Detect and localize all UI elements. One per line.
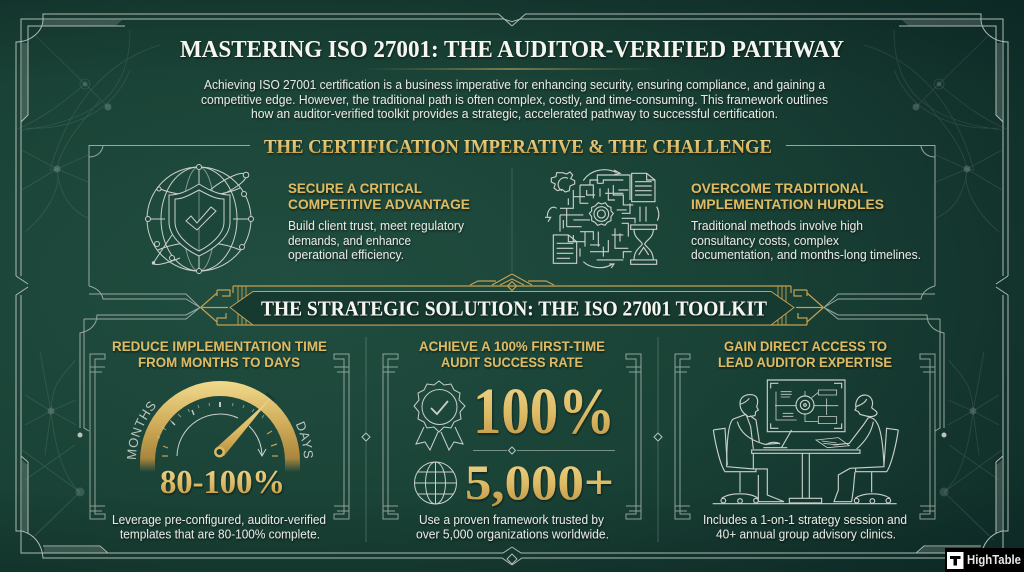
intro text: competitive edge. However, the traditional path is often complex, costly, and time-consuming. This framework outlines: [201, 92, 828, 107]
column heading: [112, 339, 327, 370]
section heading: THE CERTIFICATION IMPERATIVE & THE CHALLENGE: [264, 136, 772, 158]
column heading: AUDIT SUCCESS RATE: [441, 355, 583, 370]
panel frame: [89, 146, 935, 308]
metric divider: [473, 447, 615, 454]
column text: Use a proven framework trusted by: [419, 512, 604, 527]
intro text: how an auditor-verified toolkit provides a strategic, accelerated pathway to successful certification.: [251, 106, 778, 121]
column heading: GAIN DIRECT ACCESS TO: [724, 339, 887, 354]
logo mark: [947, 552, 964, 569]
column text: [703, 512, 907, 542]
column text: over 5,000 organizations worldwide.: [416, 526, 609, 542]
column heading: FROM MONTHS TO DAYS: [138, 355, 300, 370]
banner heading: THE STRATEGIC SOLUTION: THE ISO 27001 TOOLKIT: [261, 296, 767, 320]
text: competitive advantage: SECURE A CRITICAL: [288, 181, 422, 196]
icon: award rosette: [414, 381, 465, 450]
metric: 100%: 100%: [473, 375, 615, 448]
corner brackets: [90, 354, 349, 519]
text: implementation hurdles: [691, 181, 921, 262]
gauge chart: [126, 381, 313, 471]
gauge chart: MONTHS: [126, 402, 156, 459]
corner brackets: [383, 354, 641, 519]
text: competitive advantage: COMPETITIVE ADVANTAGE: [288, 197, 470, 212]
intro text: Achieving ISO 27001 certification is a business imperative for enhancing security, ensuring compliance, and gaining a: [204, 77, 826, 92]
text: implementation hurdles: IMPLEMENTATION HURDLES: [691, 197, 884, 212]
text: implementation hurdles: consultancy costs, complex: [691, 233, 839, 248]
icon: maze with gears, documents and hourglass: [545, 170, 659, 268]
column heading: ACHIEVE A 100% FIRST-TIME: [419, 339, 605, 354]
text: implementation hurdles: OVERCOME TRADITIONAL: [691, 181, 868, 196]
column dividers: [362, 337, 662, 542]
text: competitive advantage: demands, and enhance: [288, 233, 411, 248]
column text: [416, 512, 609, 542]
logo: HighTable: [945, 548, 1024, 572]
column text: [112, 512, 326, 542]
column: lead auditor expertise: [675, 339, 935, 542]
panel: the certification imperative and the challenge: [89, 136, 935, 308]
connector dots: [78, 432, 946, 438]
icon: auditor consultation scene: [713, 380, 898, 504]
column heading: [419, 339, 605, 370]
banner ornament: [200, 274, 824, 325]
icon: globe: [414, 462, 456, 504]
column heading: [718, 339, 892, 370]
text: competitive advantage: Build client trust, meet regulatory: [288, 218, 464, 233]
metric: 5,000+: 5,000+: [465, 454, 614, 510]
text: implementation hurdles: documentation, and months-long timelines.: [691, 247, 921, 262]
column text: templates that are 80-100% complete.: [120, 526, 320, 542]
divider: [511, 168, 513, 272]
icon: shield on globe: [146, 164, 254, 274]
intro text: [201, 77, 828, 121]
column text: Includes a 1-on-1 strategy session and: [703, 512, 907, 527]
gauge chart: DAYS: [296, 421, 313, 458]
column: first-time audit success: [383, 339, 641, 542]
column text: Leverage pre-configured, auditor-verified: [112, 512, 326, 527]
corner brackets: [675, 354, 935, 519]
column text: 40+ annual group advisory clinics.: [716, 526, 896, 542]
panel: strategic solution frame: [80, 308, 944, 431]
column heading: LEAD AUDITOR EXPERTISE: [718, 355, 892, 370]
banner: strategic solution: [200, 274, 824, 325]
column heading: REDUCE IMPLEMENTATION TIME: [112, 339, 327, 354]
column: reduce implementation time: [90, 339, 350, 542]
title rule: [360, 68, 660, 70]
metric: 80-100%: 80-100%: [160, 464, 285, 501]
title: MASTERING ISO 27001: THE AUDITOR-VERIFIED PATHWAY: [180, 36, 844, 63]
text: competitive advantage: [288, 181, 470, 262]
text: competitive advantage: operational efficiency.: [288, 247, 404, 262]
text: implementation hurdles: Traditional methods involve high: [691, 218, 863, 233]
